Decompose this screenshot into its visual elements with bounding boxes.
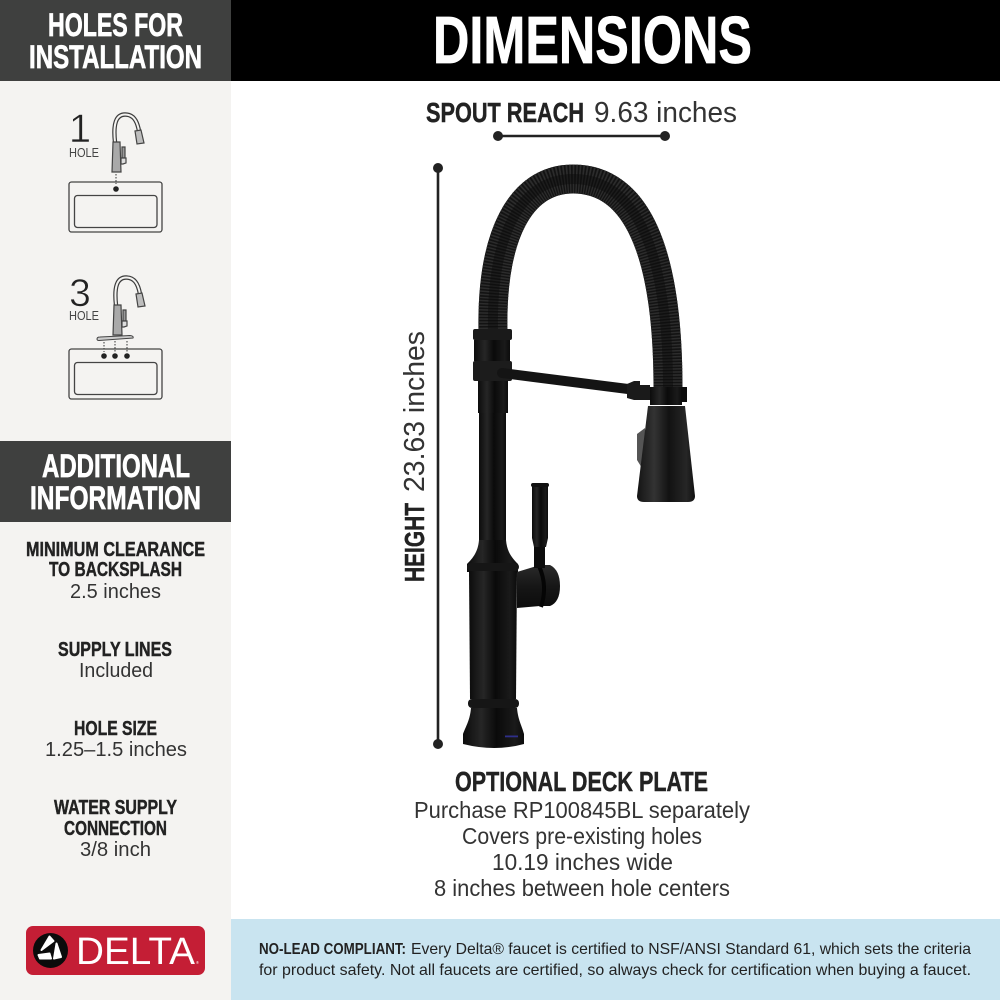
icon: delta logo: DELTA: [76, 931, 196, 973]
text: water supply connection: CONNECTION: [64, 818, 167, 840]
icon: one hole installation: [69, 107, 162, 232]
text: minimum clearance: [26, 539, 205, 603]
text: hole size: 1.25–1.5 inches: [45, 739, 187, 761]
icon: one hole installation: HOLE: [69, 145, 99, 160]
text: hole size: HOLE SIZE: [74, 718, 157, 740]
text: optional deck plate: 8 inches between hole centers: [434, 875, 730, 901]
heading: holes for installation: [0, 0, 231, 81]
faucet illustration: [463, 179, 695, 748]
heading: holes for installation: HOLES FOR: [48, 7, 183, 43]
faucet column: [463, 329, 524, 748]
panel: no-lead compliant footer: NO-LEAD COMPLIANT:: [259, 941, 406, 958]
faucet handle: [517, 483, 560, 608]
panel: sidebar background: [0, 0, 231, 1000]
text: optional deck plate: Covers pre-existing holes: [462, 823, 702, 849]
icon: three hole installation: 3: [69, 272, 91, 315]
icon: one hole installation: 1: [69, 107, 91, 151]
text: optional deck plate: 10.19 inches wide: [492, 849, 673, 875]
faucet pull bar: [502, 373, 650, 400]
text: water supply connection: WATER SUPPLY: [54, 797, 178, 819]
text: water supply connection: 3/8 inch: [80, 839, 151, 861]
text: optional deck plate: [414, 766, 750, 901]
heading: additional information: [0, 441, 231, 522]
panel: no-lead compliant footer: Every Delta® faucet is certified to NSF/ANSI Standard 61, which sets the criteria: [411, 941, 971, 958]
icon: delta logo: ®: [196, 960, 199, 965]
text: water supply connection: [54, 797, 178, 861]
label: height: HEIGHT: [399, 503, 430, 582]
text: supply lines: Included: [79, 660, 153, 682]
text: optional deck plate: Purchase RP100845BL separately: [414, 797, 750, 823]
text: optional deck plate: OPTIONAL DECK PLATE: [455, 766, 708, 797]
icon: three hole installation: [69, 272, 162, 399]
arrow: height dimension line: [433, 163, 443, 749]
text: minimum clearance: 2.5 inches: [70, 581, 161, 603]
label: height: 23.63 inches: [399, 331, 431, 492]
faucet hose: [493, 179, 668, 388]
heading: additional information: ADDITIONAL: [42, 448, 190, 484]
panel: no-lead compliant footer: for product safety. Not all faucets are certified, so always check for certification when buying a faucet.: [259, 962, 971, 979]
panel: dimensions header band: [231, 0, 1000, 81]
label: spout reach: [426, 97, 737, 129]
panel: no-lead compliant footer: [231, 919, 1000, 1000]
heading: dimensions: DIMENSIONS: [433, 3, 752, 78]
heading: holes for installation: INSTALLATION: [29, 39, 202, 75]
label: spout reach: SPOUT REACH: [426, 97, 584, 128]
text: supply lines: [58, 639, 172, 682]
icon: delta logo: [26, 926, 205, 975]
text: supply lines: SUPPLY LINES: [58, 639, 172, 661]
text: hole size: [45, 718, 187, 761]
heading: additional information: INFORMATION: [30, 480, 201, 516]
arrow: spout reach dimension line: [493, 131, 670, 141]
text: minimum clearance: TO BACKSPLASH: [49, 559, 182, 581]
icon: three hole installation: HOLE: [69, 308, 99, 323]
label: height: [399, 331, 431, 582]
faucet spray head: [637, 387, 695, 502]
text: minimum clearance: MINIMUM CLEARANCE: [26, 539, 205, 561]
label: spout reach: 9.63 inches: [594, 97, 737, 129]
